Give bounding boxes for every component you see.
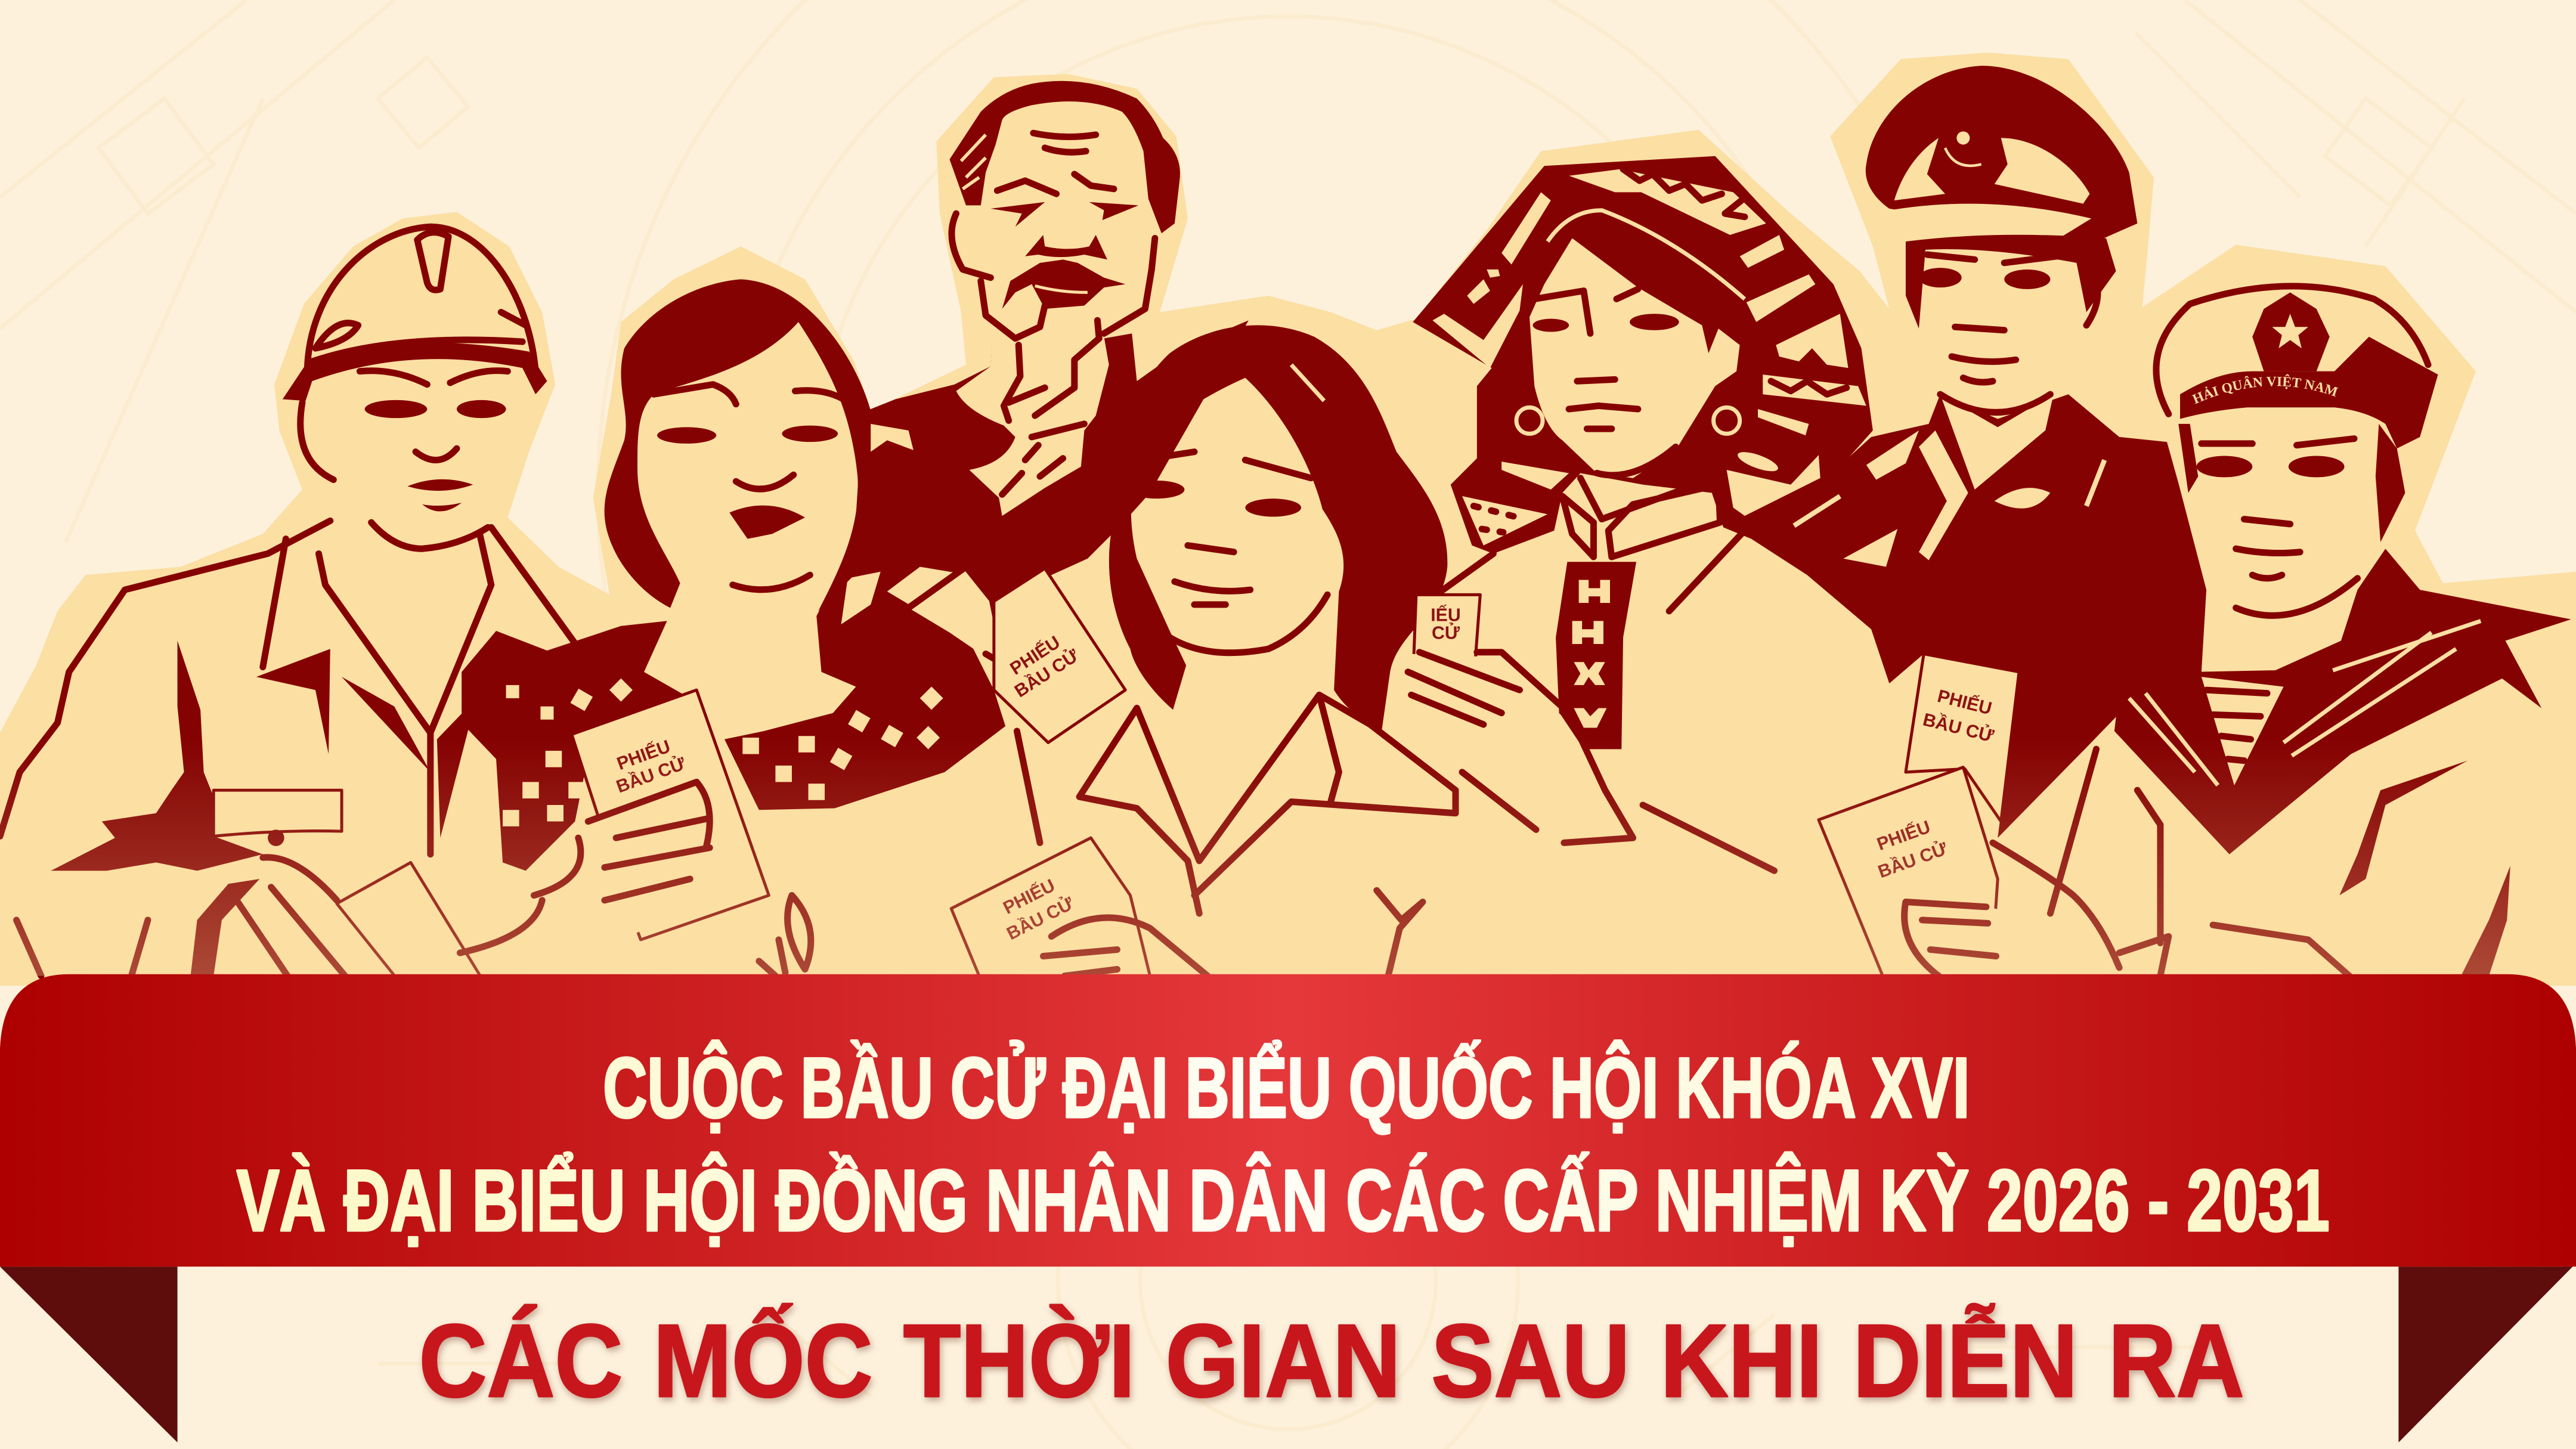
shawl triangle — [1462, 496, 1547, 546]
hand — [542, 782, 713, 949]
old man hand — [909, 567, 1005, 665]
worker mouth — [407, 479, 473, 512]
worker shirt lines — [0, 521, 330, 836]
figure: sailor — [2114, 283, 2571, 974]
collar piping — [2129, 621, 2481, 785]
hand lines — [1408, 553, 1775, 871]
old man brows — [997, 174, 1114, 194]
old man ear and jaw — [952, 213, 1151, 339]
ballot — [951, 838, 1150, 976]
arm fold — [2119, 790, 2349, 976]
neck and shirt — [2202, 677, 2284, 785]
nose and mouth — [1940, 327, 2050, 413]
brows — [1927, 255, 2098, 326]
brows — [1534, 289, 1638, 333]
figure: ethnic minority woman — [1408, 156, 1873, 871]
nose and mouth — [1170, 546, 1327, 653]
front ballot — [1819, 767, 1998, 976]
eye left — [2197, 456, 2252, 477]
figure: woman in centre — [951, 325, 1456, 976]
hand fingers — [460, 782, 710, 953]
cap star — [1956, 131, 1970, 144]
worker eye right — [457, 400, 506, 418]
old man's ballot label: BẦU CỬ — [1011, 645, 1083, 701]
front ballot label: PHIẾU — [1874, 816, 1933, 854]
headdress panels — [1432, 169, 1866, 516]
ballot label: BẦU CỬ — [1921, 709, 1996, 747]
eye left — [657, 427, 716, 444]
headdress and hair — [1413, 156, 1873, 553]
dress left — [462, 621, 690, 871]
eye right — [2004, 270, 2050, 289]
hand — [1906, 902, 2073, 976]
worker collar shadow — [256, 649, 476, 838]
helmet ridge and vents — [312, 233, 526, 361]
hand — [1410, 654, 1610, 843]
ballot label: PHIẾU — [614, 736, 673, 774]
worker collar lines — [263, 527, 577, 854]
figure: soldier — [1751, 66, 2206, 976]
red banner — [0, 974, 2576, 1267]
hair — [605, 279, 871, 611]
old man hair — [949, 81, 1180, 233]
helmet brim — [283, 343, 547, 401]
neck — [1940, 394, 2054, 490]
shawl dots — [1473, 506, 1525, 532]
eye left — [1533, 318, 1569, 332]
headdress gold arc — [1547, 210, 1745, 299]
old man's ballot — [994, 568, 1125, 742]
eye right — [1245, 499, 1301, 516]
shoulder seam — [1794, 460, 2104, 526]
eye left — [1919, 268, 1962, 287]
worker ballot — [337, 862, 487, 986]
cap top — [2156, 286, 2428, 414]
worker eye left — [365, 400, 427, 418]
cap visor — [1889, 204, 2091, 242]
ballot label: PHIẾU — [1000, 875, 1058, 918]
worker arm — [191, 879, 259, 976]
old man wrinkles — [1033, 133, 1155, 270]
old man shirt — [724, 320, 1249, 810]
face features — [654, 385, 851, 590]
cap star — [2272, 314, 2308, 348]
uniform — [1751, 394, 2206, 838]
cut-out silhouette — [0, 52, 2576, 986]
hair highlight — [1292, 365, 1324, 401]
striped shirt — [2206, 690, 2267, 761]
cap outline — [2145, 271, 2438, 448]
cap patches — [1894, 138, 2089, 204]
old man moustache — [1002, 259, 1125, 309]
hair — [1109, 325, 1447, 731]
right earring — [1714, 407, 1740, 434]
sailor collar — [2114, 549, 2571, 854]
hair under visor — [1906, 235, 2116, 329]
flower — [759, 896, 811, 976]
old man beard strands — [1002, 320, 1099, 494]
ballot — [572, 690, 769, 940]
dress squares — [503, 679, 943, 826]
subtitle: CÁC MỐC THỜI GIAN SAU KHI DIỄN RA — [419, 1303, 2244, 1419]
eye right — [2289, 456, 2345, 477]
garment trim — [1556, 562, 1636, 749]
ribbon fold: right — [2398, 1267, 2572, 1442]
collar — [1562, 478, 1741, 611]
old man eyes — [990, 202, 1138, 227]
collar highlight — [1843, 431, 1968, 567]
old man nose — [1025, 235, 1107, 259]
cap text: HẢI QUÂN VIỆT NAM — [2192, 374, 2339, 404]
illustration: group of voters — [0, 52, 2576, 986]
ballot label: PHIẾU — [1936, 686, 1994, 719]
trim marks — [1572, 580, 1610, 728]
old man neck and beard — [956, 312, 1109, 516]
hand — [1043, 918, 1208, 976]
old man's ballot label: PHIẾU — [1007, 632, 1064, 679]
old man hair flecks — [961, 135, 986, 189]
sleeve folds — [2339, 761, 2510, 976]
worker brows and eyes — [360, 371, 507, 385]
worker hand lines — [17, 857, 345, 976]
cap emblem — [2252, 292, 2330, 371]
collar and shirt — [1017, 695, 1456, 976]
headdress zigzag — [1623, 169, 1847, 394]
figure: woman with scarf — [460, 279, 943, 976]
badge — [1995, 488, 2050, 509]
brows — [1142, 452, 1311, 478]
ballot label: BẦU CỬ — [614, 753, 689, 797]
worker face — [301, 402, 488, 549]
worker helmet — [307, 227, 535, 371]
eye right — [782, 426, 838, 442]
old man shirt highlights — [841, 424, 914, 624]
title line 1: CUỘC BẦU CỬ ĐẠI BIỂU QUỐC HỘI KHÓA XVI — [603, 1040, 1970, 1135]
front ballot label: BẦU CỬ — [1875, 838, 1950, 882]
eye right — [1630, 314, 1679, 330]
worker sleeve fold — [51, 640, 263, 871]
ballot label: BẦU CỬ — [1004, 893, 1078, 944]
face — [1530, 238, 1740, 478]
pocket button — [268, 829, 284, 846]
worker pocket — [213, 790, 342, 836]
side hair and ear — [2178, 424, 2405, 542]
small ballot label: CỬ — [1432, 623, 1460, 643]
ribbon fold: left — [0, 1267, 178, 1442]
left earring — [1516, 407, 1543, 434]
figure: old man — [724, 81, 1249, 810]
cap band — [2180, 337, 2438, 448]
cap crown — [1866, 66, 2137, 242]
figure: worker — [0, 227, 577, 986]
nose and mouth — [2236, 519, 2358, 615]
ballot behind — [1906, 654, 2019, 822]
small ballot label: IẾU — [1431, 605, 1461, 625]
brows — [2202, 439, 2354, 445]
hand lines — [1905, 749, 2119, 976]
headdress oval — [1736, 448, 1780, 475]
mouth — [729, 506, 805, 539]
cap crescent — [1945, 148, 1981, 166]
nose and mouth — [1569, 379, 1676, 475]
old man hand outline — [909, 567, 1005, 665]
small ballot — [1413, 595, 1480, 682]
bottom fade of illustration — [0, 739, 2576, 976]
eye left — [1129, 481, 1184, 499]
old man lip — [1035, 286, 1088, 292]
